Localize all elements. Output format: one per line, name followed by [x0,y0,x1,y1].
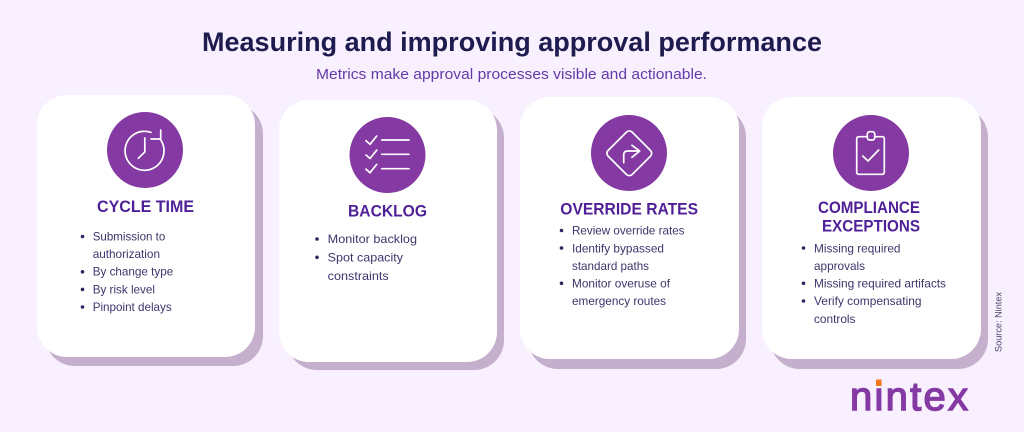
bullet list: cycle time: Submission to [93,230,166,244]
card shadow [770,107,988,369]
panel: compliance exceptions [762,97,988,369]
heading: cycle time: CYCLE TIME [97,198,194,216]
card shadow [45,104,263,366]
bullet list: override rates: standard paths [572,259,649,273]
icon: checklist [350,117,426,193]
panel: backlog [279,100,504,370]
heading: compliance exceptions [818,199,920,236]
heading: override rates: OVERRIDE RATES [560,201,698,219]
card background [37,95,255,357]
heading: compliance exceptions: COMPLIANCE [818,199,920,217]
bullet list: cycle time: By change type [93,265,174,279]
bullet list: compliance exceptions [802,241,946,326]
card background [279,100,497,362]
bullet list: compliance exceptions: approvals [814,259,865,273]
source note: Source: Nintex [994,292,1004,352]
panel: override rates [520,97,746,369]
card background [520,97,739,359]
heading: backlog: BACKLOG [348,203,427,221]
bullet list: backlog: Monitor backlog [328,232,417,246]
bullet list: backlog [315,232,417,283]
bullet list: backlog: Spot capacity [328,250,403,264]
bullet list: cycle time: By risk level [93,282,155,296]
title: Measuring and improving approval performance [202,27,822,57]
card shadow [287,108,504,370]
card background [762,97,981,359]
logo: nintex: nintex [850,375,968,419]
bullet list: cycle time: Pinpoint delays [93,300,172,314]
icon: clock with arrow [107,112,183,188]
bullet list: override rates: Review override rates [572,224,684,238]
panel: cycle time [37,95,263,366]
bullet list: compliance exceptions: Missing required artifacts [814,277,946,291]
bullet list: compliance exceptions: Verify compensating [814,294,922,308]
icon: diamond turn sign [591,115,667,191]
bullet list: override rates: Monitor overuse of [572,277,671,291]
bullet list: backlog: constraints [328,269,389,283]
bullet list: cycle time: authorization [93,247,160,261]
heading: compliance exceptions: EXCEPTIONS [822,218,920,236]
card shadow [528,107,746,369]
subtitle: Metrics make approval processes visible and actionable. [316,66,707,83]
bullet list: override rates [560,224,684,308]
bullet list: override rates: Identify bypassed [572,241,664,255]
bullet list: compliance exceptions: Missing required [814,241,900,255]
bullet list: override rates: emergency routes [572,294,666,308]
bullet list: cycle time [81,230,174,314]
icon: clipboard check [833,115,909,191]
bullet list: compliance exceptions: controls [814,312,856,326]
